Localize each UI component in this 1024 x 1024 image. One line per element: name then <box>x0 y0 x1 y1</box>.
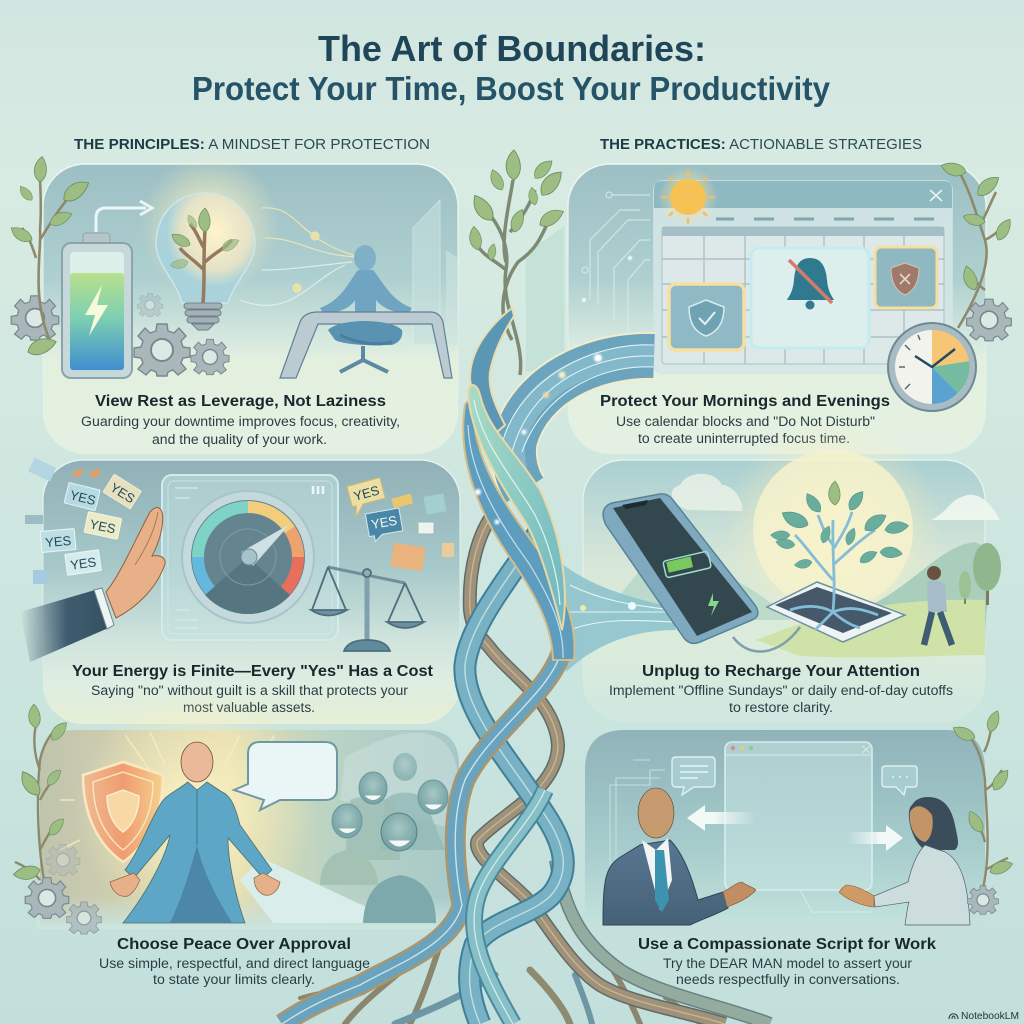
flow lines to the phone <box>556 560 676 672</box>
yes cards left <box>25 458 141 584</box>
card body <box>99 956 370 987</box>
ribbon: top gold edged <box>470 308 514 440</box>
card body: to create uninterrupted focus time. <box>638 431 850 446</box>
icon: trees <box>959 543 1001 605</box>
yes cards left: YES <box>45 533 72 550</box>
block: do not disturb bell <box>751 248 869 348</box>
icon: tablet with tree <box>767 481 910 642</box>
card body: Guarding your downtime improves focus, creativity, <box>81 414 400 429</box>
title: The Art of Boundaries: <box>318 28 706 69</box>
yes cards right: YES <box>370 513 399 532</box>
yes cards right: YES <box>352 482 381 504</box>
card body: Implement "Offline Sundays" or daily end-of-day cutoffs <box>609 683 953 698</box>
panel: choose peace over approval <box>36 690 464 987</box>
card heading: Choose Peace Over Approval <box>117 936 351 953</box>
card body <box>663 956 913 987</box>
card body: most valuable assets. <box>183 700 315 715</box>
central braided roots <box>282 150 770 1024</box>
calendar window <box>654 181 952 373</box>
warm glow with rays <box>60 690 315 930</box>
yes cards left: YES <box>68 487 98 508</box>
title: Protect Your Time, Boost Your Productivity <box>192 70 831 107</box>
landscape <box>600 474 1000 658</box>
figure: man in suit <box>603 788 756 925</box>
gears <box>11 293 229 376</box>
panel: your energy is finite <box>20 458 460 724</box>
strand: second teal <box>474 790 545 1024</box>
figure: person in long coat <box>110 742 280 923</box>
strand: gold edged <box>282 645 563 1024</box>
panel: compassionate script <box>585 730 985 987</box>
sun <box>723 420 943 640</box>
ribbon: blue lower band <box>463 402 575 660</box>
figure: walking man <box>924 566 952 645</box>
root branches <box>300 930 700 1024</box>
vine: bottom right <box>951 709 1014 914</box>
section heading: principles: THE PRINCIPLES: A MINDSET FOR PROTECTION <box>74 137 430 153</box>
upper branch leaves <box>468 150 566 261</box>
card body: needs respectfully in conversations. <box>676 972 900 987</box>
energy flow lines <box>240 208 360 305</box>
figure: meditating person at desk <box>280 245 452 378</box>
yes cards left: YES <box>69 554 97 573</box>
vine: bottom left <box>12 704 101 934</box>
bottom fade <box>36 895 464 929</box>
big flow arc from practices <box>503 345 654 490</box>
crowd of approving faces <box>320 753 448 923</box>
card body <box>609 683 953 715</box>
clouds <box>340 733 459 830</box>
title <box>192 28 831 107</box>
vines with leaves <box>8 156 1014 934</box>
road <box>240 858 400 923</box>
figure: hand saying stop <box>20 508 165 662</box>
figure: woman in blouse <box>839 797 970 925</box>
block: shield check <box>669 284 744 350</box>
vine: top left <box>8 156 92 358</box>
card body: and the quality of your work. <box>152 432 327 447</box>
strand: right root <box>556 860 770 1024</box>
section heading: practices: THE PRACTICES: ACTIONABLE STRATEGIES <box>600 137 922 153</box>
card heading: View Rest as Leverage, Not Laziness <box>95 393 386 410</box>
yes cards right <box>347 478 454 571</box>
icon: phone charging <box>603 494 800 652</box>
block: shield x <box>875 247 937 308</box>
card heading: Protect Your Mornings and Evenings <box>600 393 890 410</box>
glass window <box>725 742 872 912</box>
card heading: Your Energy is Finite—Every "Yes" Has a Cost <box>72 663 434 680</box>
panel: unplug to recharge <box>556 420 1001 722</box>
card body: to state your limits clearly. <box>153 972 315 987</box>
card body <box>91 683 409 715</box>
yes cards left: YES <box>88 516 117 537</box>
speech bubble <box>234 742 337 810</box>
glass gauge frame <box>162 475 338 640</box>
card body: Use calendar blocks and "Do Not Disturb" <box>616 414 875 429</box>
icon: sun <box>658 167 718 227</box>
card heading: Use a Compassionate Script for Work <box>638 936 936 953</box>
icon: shield <box>83 762 163 862</box>
icon: speedometer <box>182 491 314 623</box>
strand: teal braid <box>465 530 563 1024</box>
glass side panel <box>525 225 565 372</box>
yes cards left: YES <box>108 480 138 506</box>
card body: Try the DEAR MAN model to assert your <box>663 956 913 971</box>
card body <box>616 414 875 446</box>
buildings <box>413 200 458 345</box>
circuit lines <box>610 760 665 870</box>
arrow: battery to bulb <box>96 201 152 232</box>
card body <box>81 414 400 447</box>
ribbon: green upper band <box>468 385 565 630</box>
circuit lines <box>582 192 650 340</box>
panel: view rest as leverage <box>11 155 458 454</box>
card body: Use simple, respectful, and direct language <box>99 956 370 971</box>
icon: battery <box>62 233 132 378</box>
icon: gear <box>967 299 1011 341</box>
icon: balance scales <box>311 567 424 651</box>
speech bubbles <box>672 757 917 795</box>
icon: clock <box>888 323 976 411</box>
arrow right <box>847 825 903 851</box>
arrow left <box>687 805 755 831</box>
panel: protect mornings and evenings <box>525 164 1011 454</box>
upper tree branches <box>475 180 548 375</box>
card heading: Unplug to Recharge Your Attention <box>642 663 920 680</box>
icon: light bulb with tree <box>140 155 280 330</box>
card body: Saying "no" without guilt is a skill that protects your <box>91 683 409 698</box>
card body: to restore clarity. <box>729 700 833 715</box>
strand: brown <box>470 508 725 1024</box>
vine: top right <box>940 160 1014 328</box>
watermark: NotebookLM <box>961 1011 1019 1022</box>
